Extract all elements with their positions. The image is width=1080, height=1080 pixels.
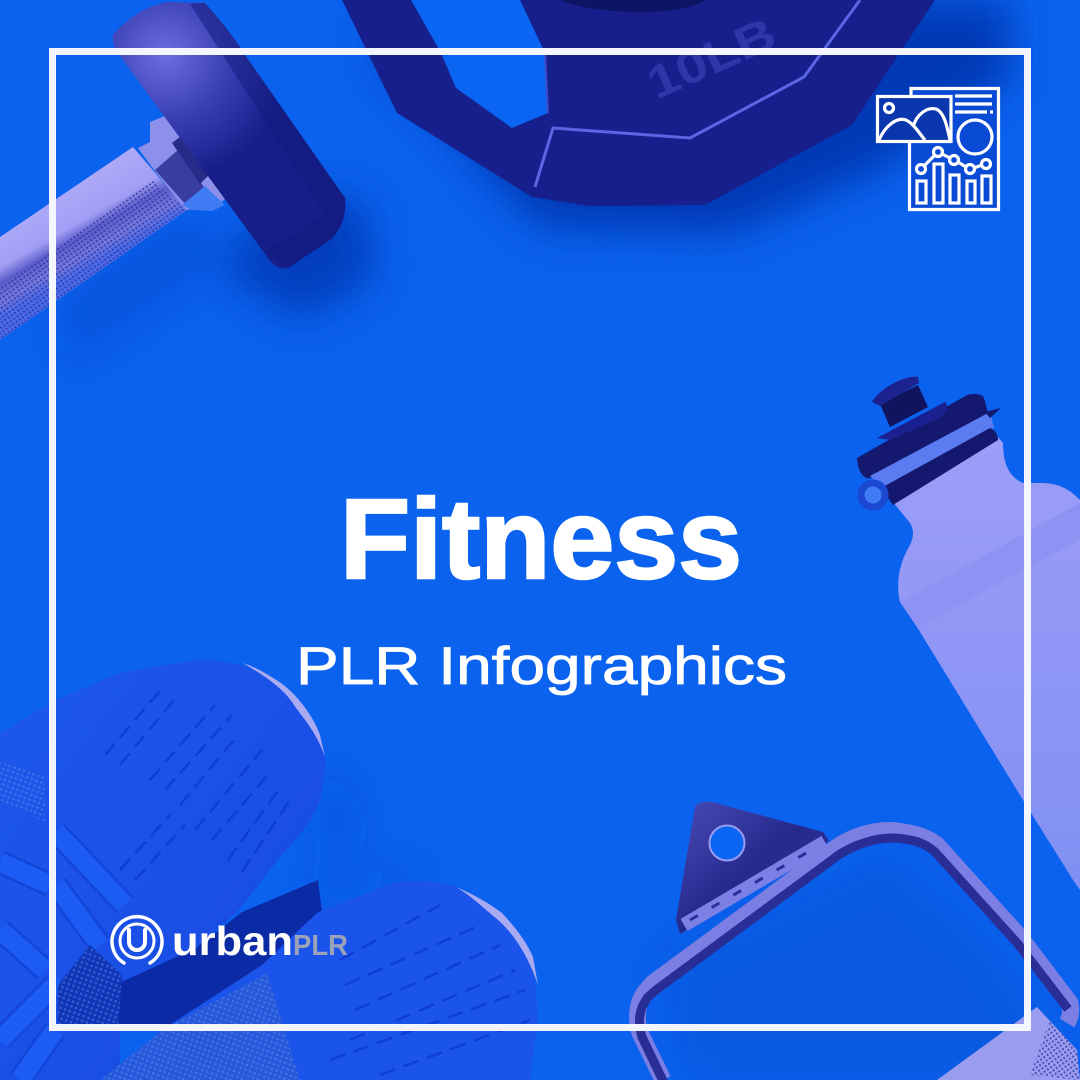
far shoe tongue	[0, 762, 45, 822]
plate embossed label: 10LB	[639, 7, 783, 109]
logo wordmark PLR: PLR	[293, 930, 348, 962]
title: Fitness	[340, 476, 742, 602]
photo: weight plate	[342, 0, 935, 206]
icon: infographic document	[878, 88, 998, 210]
gap shadow between shoes	[60, 880, 322, 1030]
photo: water bottle	[857, 377, 1080, 890]
tube	[637, 831, 1071, 1080]
far toe cap	[243, 663, 325, 757]
logo mark	[112, 917, 162, 963]
near toe cap	[456, 887, 538, 985]
photo: dumbbell	[0, 2, 345, 340]
connector hole	[710, 826, 744, 860]
logo wordmark: urban	[172, 918, 293, 964]
cable grip	[937, 1007, 1080, 1080]
logo: urbanPLR	[112, 917, 348, 964]
near shoe tongue	[100, 973, 300, 1080]
subtitle: PLR Infographics	[296, 637, 787, 696]
laces	[0, 832, 125, 1080]
dumbbell plate	[113, 2, 345, 269]
photo: sneakers	[0, 660, 538, 1080]
lace strap	[58, 945, 122, 1030]
far sneaker	[0, 660, 325, 1080]
near sneaker	[100, 881, 538, 1080]
connector plate	[676, 802, 829, 934]
near shoe perforations	[330, 905, 530, 1075]
bottle body	[893, 428, 1080, 890]
far shoe perforations	[105, 685, 290, 880]
dumbbell collar	[138, 116, 228, 211]
dumbbell handle	[0, 147, 187, 340]
plate cutout	[411, 0, 548, 128]
photo: suspension handle	[637, 802, 1080, 1080]
bottle grip band	[900, 503, 1080, 627]
weld	[684, 842, 825, 925]
bottle cap	[857, 394, 988, 478]
